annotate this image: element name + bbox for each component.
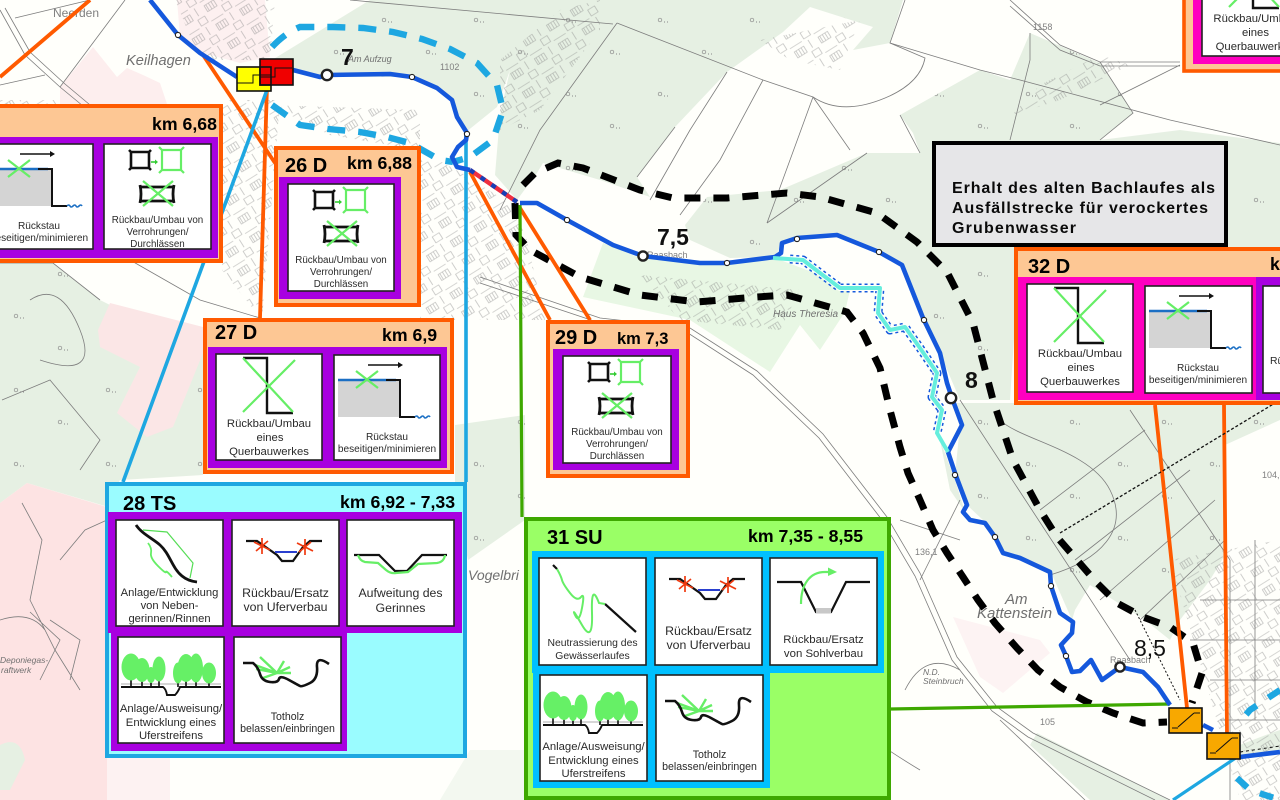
map place names: Am xyxy=(1004,591,1028,608)
card: Aufweitung xyxy=(347,520,454,626)
heading: 27 D xyxy=(215,322,257,344)
card: Querbauwerk: Rückbau/Umbau xyxy=(227,418,311,430)
card: Uferstreifen: Entwicklung eines xyxy=(126,717,217,729)
card: Querbauwerk: eines xyxy=(256,432,284,444)
card: Nebengerinne: Anlage/Entwicklung xyxy=(121,587,218,599)
map place names: 105 xyxy=(1040,717,1055,727)
card: Uferverbau xyxy=(655,558,762,665)
heading: 32 D xyxy=(1028,256,1070,278)
callout: Erhalt des alten Bachlaufes xyxy=(934,143,1226,245)
card: Totholz xyxy=(656,675,763,781)
map place names: Am Aufzug xyxy=(347,54,392,64)
map place names: Raasbach xyxy=(1110,655,1151,665)
heading: 28 TS xyxy=(123,493,176,515)
card: Uferverbau: Rückbau/Ersatz xyxy=(242,586,329,600)
card: Verrohrungen xyxy=(288,184,394,291)
map place names: Steinbruch xyxy=(923,676,964,686)
card: Sohlverbau: Rückbau/Ersatz xyxy=(783,634,864,646)
card: Totholz: Totholz xyxy=(271,711,304,723)
card: Uferstreifen: Entwicklung eines xyxy=(548,755,639,767)
heading: 31 SU xyxy=(547,527,603,549)
map place names: Vogelbri xyxy=(468,567,520,583)
card: Totholz xyxy=(234,637,341,743)
card: Rückstau: Rückstau xyxy=(366,432,408,443)
km labels: 7,5 xyxy=(657,224,689,250)
map place names: Neerden xyxy=(53,6,99,20)
card: Aufweitung: Gerinnes xyxy=(376,601,425,615)
map place names: Keilhagen xyxy=(126,53,191,69)
river km markers xyxy=(175,32,1125,672)
piped reach red-blue dashes xyxy=(470,170,517,202)
card: Verrohrungen: Rückbau/Umbau von xyxy=(112,215,203,226)
card: Querbauwerk xyxy=(216,354,322,460)
card: partial third xyxy=(1263,286,1280,393)
map place names: 136,1 xyxy=(915,547,938,557)
dashed black lower boundary xyxy=(515,203,1167,723)
panel: 27 D xyxy=(205,320,452,472)
card: Verrohrungen: Verrohrungen/ xyxy=(310,267,372,278)
card: Uferverbau: von Uferverbau xyxy=(243,600,328,614)
panel: 31 SU xyxy=(526,519,889,798)
card: Querbauwerk: Querbauwerkes xyxy=(229,446,309,458)
map place names: Haus Theresia xyxy=(773,309,838,320)
heading: 29 D xyxy=(555,327,597,349)
card: Rückstau xyxy=(334,355,440,460)
card: Nebengerinne xyxy=(116,520,223,626)
card: Nebengerinne: von Neben- xyxy=(141,600,199,612)
card: Querbauwerk: eines xyxy=(1067,362,1095,374)
card: Uferstreifen xyxy=(540,675,647,781)
panel: 32 D xyxy=(1016,249,1280,403)
card: Verrohrungen: Verrohrungen/ xyxy=(586,439,648,450)
card: Neutrassierung xyxy=(539,558,646,665)
card: Totholz: belassen/einbringen xyxy=(240,723,335,735)
panel: km 6,68 xyxy=(0,106,221,261)
map place names: Deponiegas- xyxy=(0,655,48,665)
dashed light-blue section boundary xyxy=(272,27,1280,800)
card: Querbauwerk: Rückbau/Umbau xyxy=(1038,348,1122,360)
card: Uferstreifen xyxy=(118,637,224,743)
card: Uferverbau: Rückbau/Ersatz xyxy=(665,624,752,638)
card: Neutrassierung: Gewässerlaufes xyxy=(555,651,630,662)
card: Verrohrungen: Verrohrungen/ xyxy=(126,227,189,238)
km labels: 7 xyxy=(341,44,354,70)
card: Totholz: belassen/einbringen xyxy=(662,761,757,773)
callout: Erhalt des alten Bachlaufes: Erhalt des alten Bachlaufes als xyxy=(952,180,1215,197)
card: Nebengerinne: gerinnen/Rinnen xyxy=(128,613,211,625)
map place names: 1158 xyxy=(1033,22,1052,32)
panel: 28 TS xyxy=(107,484,465,756)
card: Rückstau: beseitigen/minimieren xyxy=(1149,375,1247,386)
map place names: 1102 xyxy=(440,62,459,72)
card: Uferverbau xyxy=(232,520,339,626)
card: Uferstreifen: Anlage/Ausweisung/ xyxy=(120,703,223,715)
card: Verrohrungen: Durchlässen xyxy=(590,451,644,462)
card: Totholz: Totholz xyxy=(693,749,726,761)
card: Rückstau: Rückstau xyxy=(1177,363,1219,374)
panel: 29 D xyxy=(548,322,688,476)
card: Verrohrungen: Rückbau/Umbau von xyxy=(295,255,387,266)
pale green garden area xyxy=(583,243,850,372)
card: Querbauwerk: Querbauwerkes xyxy=(1040,376,1120,388)
panel: 27 D: km 6,9 xyxy=(382,325,437,345)
callout: Erhalt des alten Bachlaufes: Ausfällstrecke für verockertes xyxy=(952,200,1208,217)
panel: top right partial measure xyxy=(1184,0,1280,71)
card: Verrohrungen xyxy=(563,356,671,463)
card: Neutrassierung: Neutrassierung des xyxy=(547,638,638,649)
km labels: 8 xyxy=(965,367,978,393)
card: Rückstau xyxy=(0,144,93,249)
map place names: raftwerk xyxy=(1,665,32,675)
card: Uferstreifen: Uferstreifens xyxy=(139,730,203,742)
km labels: 8,5 xyxy=(1134,635,1166,661)
panel: 28 TS: km 6,92 - 7,33 xyxy=(340,492,455,512)
card: Rückstau: Rückstau xyxy=(18,221,60,232)
card: Querbauwerk xyxy=(1027,284,1133,392)
panel: 29 D: km 7,3 xyxy=(617,330,668,348)
map place names: Raasbach xyxy=(647,250,688,260)
map place names: N.D. xyxy=(923,667,940,677)
panel: 26 D: km 6,88 xyxy=(347,153,412,173)
card: Verrohrungen: Durchlässen xyxy=(130,239,185,250)
card: Rückstau: beseitigen/minimieren xyxy=(338,444,436,455)
card: Sohlverbau xyxy=(770,558,877,665)
structure marker: yellow and red squares xyxy=(237,59,293,91)
map place names: Kattenstein xyxy=(977,605,1052,622)
card: Uferverbau: von Uferverbau xyxy=(666,638,751,652)
card: Verrohrungen: Rückbau/Umbau von xyxy=(571,427,663,438)
card: Sohlverbau: von Sohlverbau xyxy=(784,648,863,660)
card: Aufweitung: Aufweitung des xyxy=(358,586,443,600)
card: Verrohrungen xyxy=(104,144,211,250)
heading: 26 D xyxy=(285,155,327,177)
structure marker: orange squares xyxy=(1169,708,1240,759)
card: Uferstreifen: Uferstreifens xyxy=(561,768,626,780)
panel: top right partial measure: eines xyxy=(1242,27,1269,39)
old channel retained for ochre water xyxy=(773,258,948,452)
panel: 26 D xyxy=(276,148,419,305)
callout: Erhalt des alten Bachlaufes: Grubenwasser xyxy=(952,220,1076,237)
heading: km 6,68 xyxy=(152,114,217,134)
panel: 31 SU: km 7,35 - 8,55 xyxy=(748,526,863,546)
card: Uferstreifen: Anlage/Ausweisung/ xyxy=(542,741,646,753)
card: Verrohrungen: Durchlässen xyxy=(314,279,368,290)
dashed black upper boundary xyxy=(523,163,1202,703)
km labels xyxy=(341,44,1166,661)
card: Rückstau xyxy=(1145,286,1252,393)
